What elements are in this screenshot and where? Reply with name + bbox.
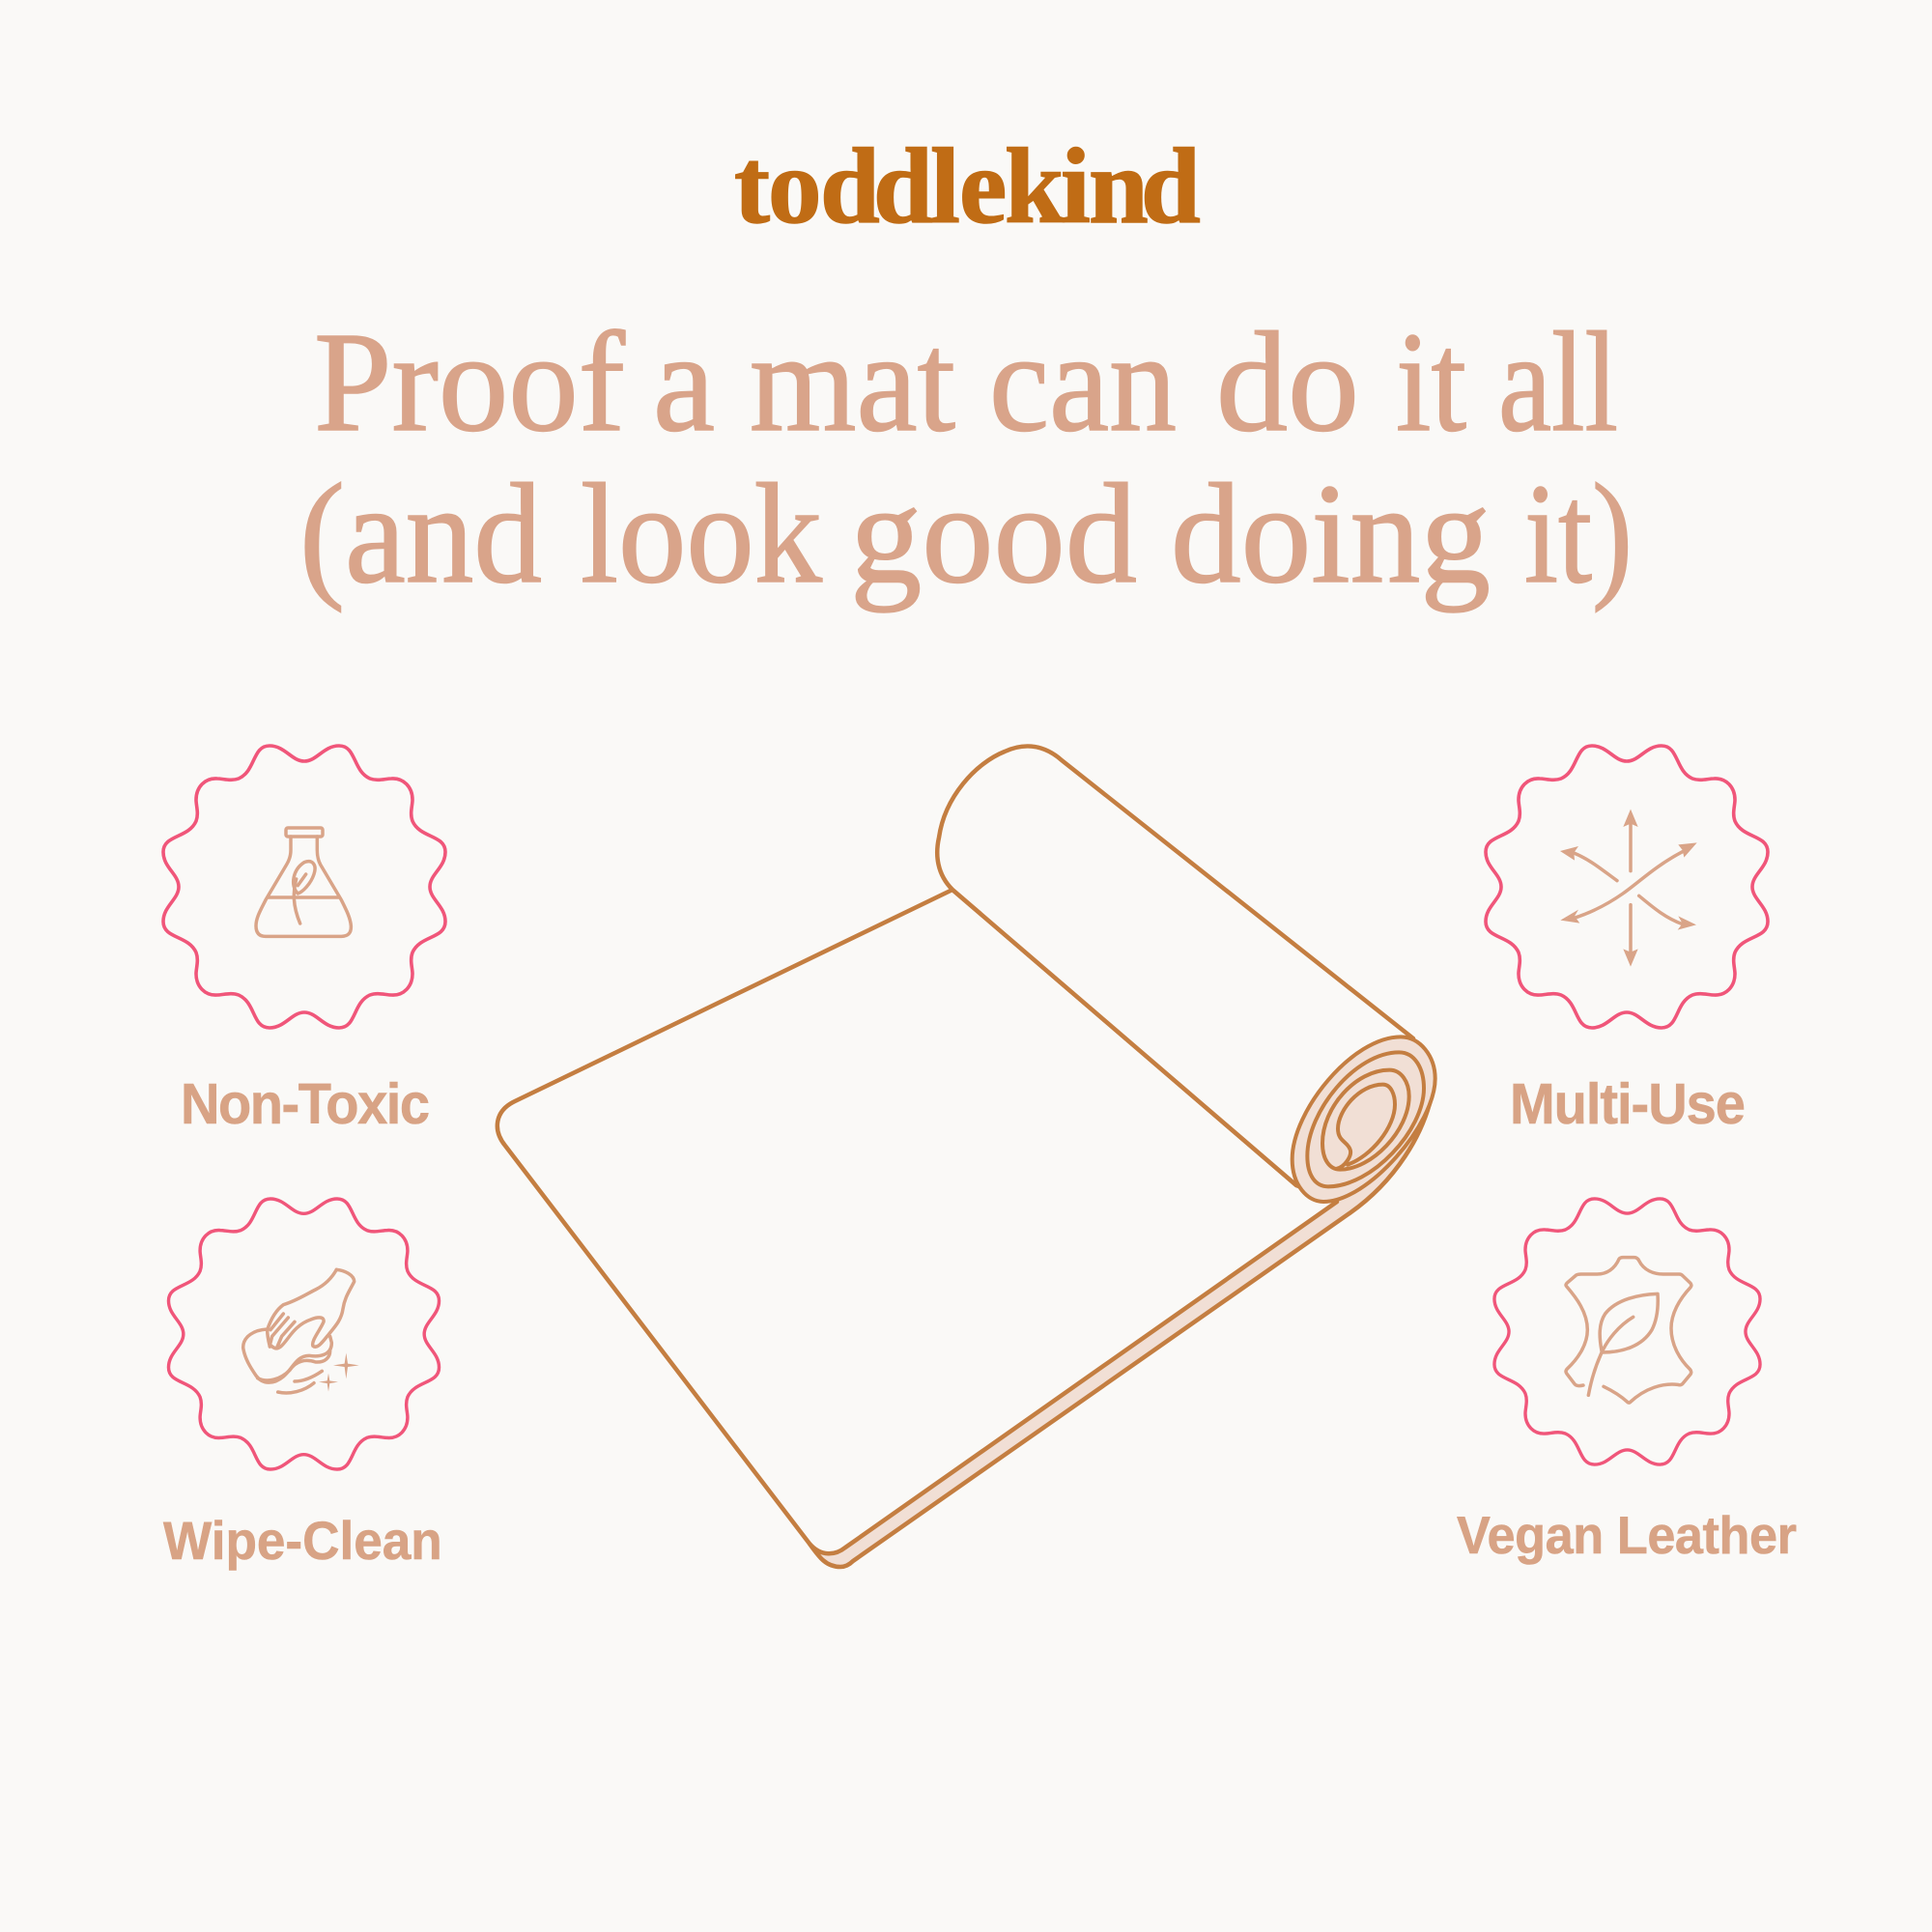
badge outline: Wipe-Clean [168, 1199, 440, 1469]
badge: Multi-Use [1486, 746, 1768, 1136]
icon: leather hide with leaf [1566, 1258, 1691, 1403]
badge: Non-Toxic [163, 746, 445, 1136]
illustration: rolled mat [497, 746, 1435, 1567]
label: Vegan Leather: Vegan Leather [1457, 1506, 1797, 1565]
badge outline: Multi-Use [1486, 746, 1768, 1028]
badge outline: Vegan Leather [1494, 1199, 1760, 1464]
icon: hand wiping with sparkles [243, 1269, 359, 1393]
badge: Vegan Leather [1457, 1199, 1797, 1565]
title: look [581, 455, 822, 613]
title: good [850, 455, 1137, 613]
title: it) [1524, 455, 1633, 613]
title: a [653, 303, 715, 462]
title: (and [299, 455, 542, 613]
title: Proof [314, 303, 626, 462]
title [299, 303, 1633, 613]
title: doing [1171, 455, 1491, 613]
logo: toddlekind: toddlekind [734, 128, 1201, 246]
mat flat surface [497, 890, 1337, 1553]
label: Multi-Use: Multi-Use [1510, 1073, 1746, 1136]
mat rolled back sheet [937, 746, 1413, 1185]
mat roll end spiral [1293, 1037, 1435, 1202]
label: Non-Toxic: Non-Toxic [181, 1073, 430, 1136]
icon: flask with leaf [256, 828, 351, 936]
icon: arrows in six directions [1560, 810, 1697, 967]
title: can [989, 303, 1177, 462]
title: all [1498, 303, 1618, 462]
title: mat [750, 303, 955, 462]
title: it [1396, 303, 1466, 462]
badge outline: Non-Toxic [163, 746, 445, 1028]
badge: Wipe-Clean [163, 1199, 442, 1571]
title: do [1216, 303, 1359, 462]
mat underside strip [810, 1079, 1435, 1567]
label: Wipe-Clean: Wipe-Clean [163, 1511, 442, 1571]
